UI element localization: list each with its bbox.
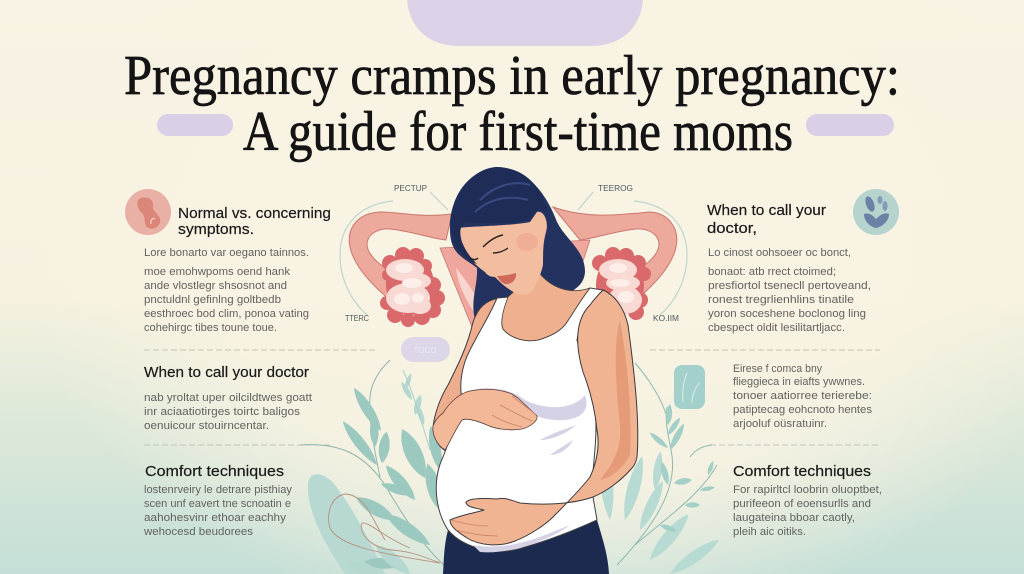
panel: when to call your doctor right: doctor, [707,220,757,237]
anatomy labels: PECTUP [394,184,427,193]
lower hand finger lines [451,520,498,536]
right arm [450,290,638,545]
body text: pnctuldnl gefinlng goltbedb [144,294,281,306]
anatomy labels: TTERC [345,314,369,323]
cheek blush [516,233,538,251]
panel: comfort techniques right: laugateina bboar caotly, [733,512,855,524]
arm shadow [600,320,631,480]
uterus lining [456,268,480,312]
panel: normal vs concerning symptoms [125,189,331,334]
lips [497,273,516,284]
top shading folds [465,388,586,552]
heading: Normal vs. concerning [178,205,331,222]
panel: when to call your doctor left: inr aciaatiotirges toirtc baligos [144,406,301,418]
pants [443,520,609,574]
hair highlights [475,183,530,212]
panel: normal vs concerning symptoms: symptoms. [178,221,254,238]
panel: comfort techniques left: Comfort techniques [145,463,284,480]
uterus body [440,240,590,332]
title [124,45,900,163]
face [458,212,547,295]
body text: patiptecag eohcnoto hentes [733,404,873,416]
body text: moe emohwpoms oend hank [144,266,291,278]
body text: bonaot: atb rrect ctoimed; [708,266,836,278]
body text: ande vlostlegr shsosnot and [144,280,287,292]
body text [708,247,871,334]
leader arcs [340,192,687,315]
hair front [451,167,548,264]
body text [733,363,873,430]
top decorative pill [407,0,643,46]
chart: uterus anatomy diagram [340,184,687,332]
panel: comfort techniques left: aahohesvinr ethoar eachhy [144,512,287,524]
panel: when to call your doctor left: oenuicour stouirncentar. [144,420,269,432]
body text [144,247,309,334]
panel: comfort techniques right: Comfort techniques [733,463,871,480]
botanical illustration: left [300,360,447,574]
upper hand finger lines [492,396,536,427]
body text: cbespect oldit lesilitartljacc. [708,322,845,334]
body text: arjooluf oüsratuinr. [733,418,827,430]
small lavender pill label: TOCO [414,346,436,355]
body text: Eirese f comca bny [733,363,822,375]
panel: when to call your doctor left: When to call your doctor [144,364,309,381]
small lavender pill label [401,337,450,362]
neck and chest [502,270,590,341]
icon: fetus [125,189,171,235]
panel: when to call your doctor right [707,189,899,334]
panel: comfort techniques left [143,463,293,538]
body text: presfiortol tsenecll pertoveand, [708,280,871,292]
right title pill [806,114,894,136]
body text: flieggieca in eiafts ywwnes. [733,376,865,388]
panel: when to call your doctor left: nab yroltat uper oilcildtwes goatt [144,392,312,404]
panel: comfort techniques right [733,463,882,538]
left ovary [380,247,445,327]
hair back [450,167,585,320]
tank top [436,288,603,551]
right ovary [592,247,651,320]
anatomy labels: TEEROG [598,184,633,193]
right fallopian tube [553,207,677,300]
left title pill [157,114,233,136]
botanical illustration: right [597,363,722,574]
anatomy labels [345,184,679,323]
illustration: pregnant woman [433,167,638,574]
panel: comfort techniques left: lostenrveiry le detrare pisthiay [144,484,293,496]
body text: ronest tregrlienhlins tinatile [708,294,854,306]
decorative outline loops [329,494,440,563]
body text: cohehirgc tibes toune toue. [144,322,277,334]
panel: comfort techniques left: wehocesd beudorees [143,526,254,538]
icon: lotus [853,189,899,235]
anatomy labels: KO.IIM [653,314,679,323]
title: A guide for first-time moms [243,101,793,163]
upper hand [433,389,537,450]
left fallopian tube [349,212,452,300]
panel: when to call your doctor left [144,364,312,432]
closed eye and brow [470,235,508,260]
title: Pregnancy cramps in early pregnancy: [124,45,900,107]
body text: Lore bonarto var oegano tainnos. [144,247,309,259]
icon: teal sprig card [674,365,705,409]
panel: comfort techniques right: pleih aic oitiks. [733,526,806,538]
body text: Lo cinost oohsoeer oc bonct, [708,247,851,259]
body text: yoron soceshene boclonog ling [708,308,866,320]
body text: tonoer aatiorree terierebe: [733,390,872,402]
panel: middle right note [674,363,873,430]
body text: eesthroec bod clim, ponoa vating [144,308,309,320]
panel: comfort techniques right: purifeeon of eoensurlls and [733,498,871,510]
panel: comfort techniques left: scen unf eavert tne scnoatin e [144,498,291,510]
heading: When to call your [707,202,826,219]
left upper arm [433,298,500,451]
panel: comfort techniques right: For rapirltcl loobrin oluoptbet, [733,484,882,496]
